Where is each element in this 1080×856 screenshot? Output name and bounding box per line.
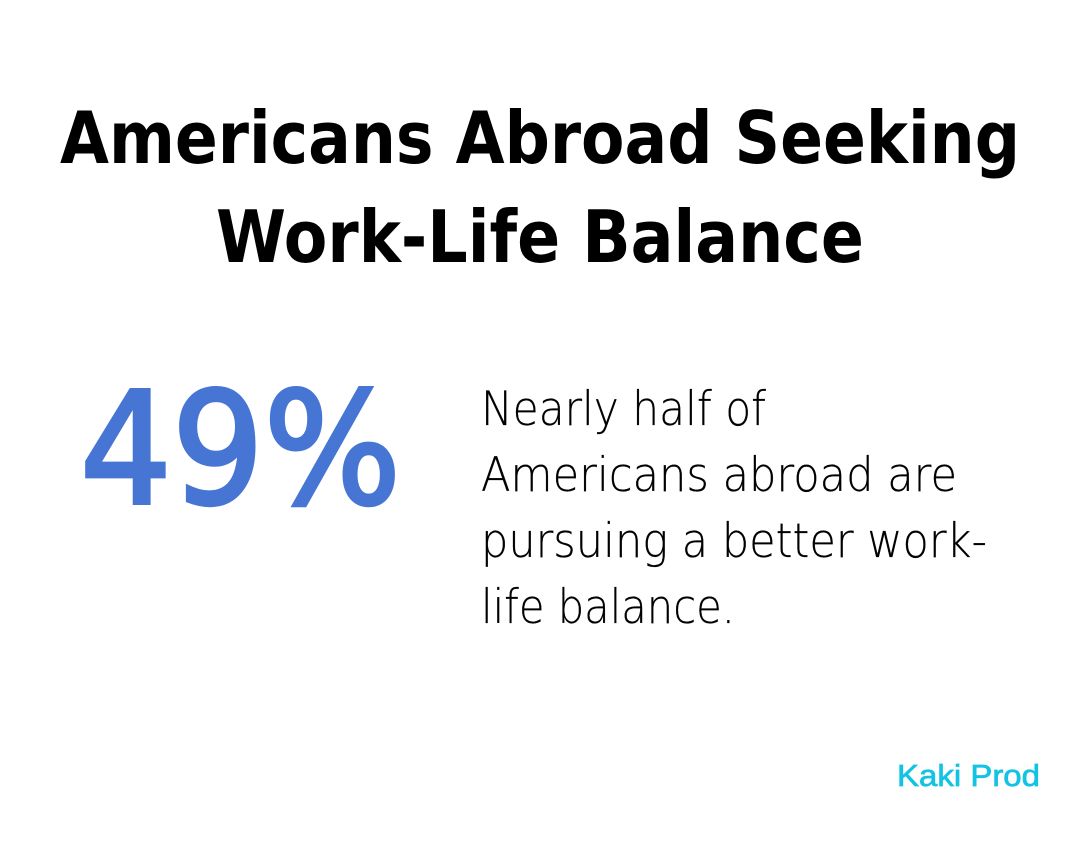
description text: pursuing a better work-	[481, 514, 987, 569]
title: Work-Life Balance	[216, 195, 864, 279]
big statistic: 49%: 49%	[80, 359, 401, 540]
description text: life balance.	[481, 580, 735, 635]
description text: Americans abroad are	[481, 448, 957, 503]
description text: Nearly half of	[481, 382, 766, 437]
title	[60, 96, 1020, 279]
description text	[481, 382, 987, 635]
logo: Kaki Prod: Kaki Prod	[897, 758, 1040, 793]
